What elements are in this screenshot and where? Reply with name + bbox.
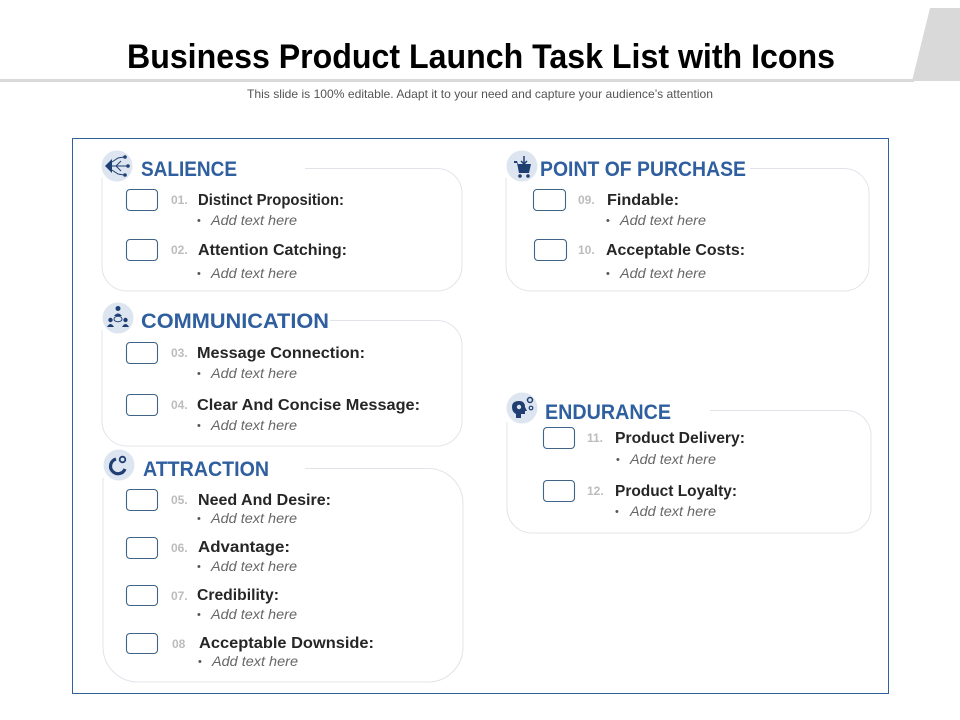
panel: point of purchase [506,150,869,291]
item 06: Advantage: [198,539,290,556]
item 02: Add text here [210,265,297,281]
item 10 [534,240,745,281]
item 03: 03. [171,346,188,360]
item 09: Add text here [619,212,706,228]
heading: attraction: ATTRACTION [143,458,269,481]
item 06: Add text here [210,558,297,574]
item 03: • [197,368,201,380]
item 09: • [606,215,610,227]
icon: head with gears [506,392,538,424]
item 04: Add text here [210,417,297,433]
item 07: Credibility: [197,587,279,604]
item 08: 08 [172,637,186,651]
item 08: • [198,656,202,668]
panel: salience [102,150,462,291]
outer frame [72,138,888,694]
item 07: • [197,609,201,621]
item 04 [126,394,420,433]
icon: shopping cart [506,150,538,182]
item 11: • [616,454,620,466]
item 07 [126,586,297,622]
item 03: Add text here [210,365,297,381]
item 12: • [615,506,619,518]
icon: network head [102,150,132,182]
heading: communication: COMMUNICATION [141,310,329,333]
item 09: Findable: [607,192,679,209]
item 09 [534,190,706,228]
item 07: Add text here [210,606,297,622]
item 01: Add text here [210,212,297,228]
item 05: • [197,513,201,525]
item 10: 10. [578,243,595,257]
item 09: 09. [578,193,595,207]
icon: magnet [104,450,134,480]
panel: attraction [103,450,463,682]
item 12: Product Loyalty: [615,483,737,500]
heading: salience: SALIENCE [141,158,237,181]
item 01: • [197,215,201,227]
item 10: Add text here [619,265,706,281]
item 03: Message Connection: [197,345,365,362]
item 05 [126,490,331,526]
item 01: 01. [171,193,188,207]
panel: communication [102,302,462,446]
item 02 [126,240,347,281]
item 11: Product Delivery: [615,430,745,447]
item 05: 05. [171,493,188,507]
item 12: 12. [587,484,604,498]
item 03 [126,342,365,381]
heading: endurance: ENDURANCE [545,401,671,424]
item 02: • [197,268,201,280]
item 11 [544,428,745,467]
item 12 [544,480,737,519]
title: Business Product Launch Task List with Icons [127,38,835,76]
item 04: Clear And Concise Message: [197,397,420,414]
subtitle: This slide is 100% editable. Adapt it to your need and capture your audience’s attention [247,87,713,101]
item 02: 02. [171,243,188,257]
item 06: 06. [171,541,188,555]
item 06: • [197,561,201,573]
item 01 [126,190,344,228]
item 02: Attention Catching: [198,242,347,259]
item 06 [126,538,297,574]
item 04: • [197,420,201,432]
item 07: 07. [171,589,188,603]
item 04: 04. [171,398,188,412]
heading: point of purchase: POINT OF PURCHASE [540,158,746,181]
item 12: Add text here [629,503,716,519]
item 08: Acceptable Downside: [199,635,374,652]
item 08: Add text here [211,653,298,669]
item 05: Add text here [210,510,297,526]
item 08 [126,634,374,669]
panel: endurance [506,392,871,533]
item 10: Acceptable Costs: [606,242,745,259]
header band [0,8,960,82]
item 01: Distinct Proposition: [198,192,344,209]
item 10: • [606,268,610,280]
item 11: 11. [587,431,603,445]
item 11: Add text here [629,451,716,467]
item 05: Need And Desire: [198,492,331,509]
icon: people talking [102,302,134,334]
